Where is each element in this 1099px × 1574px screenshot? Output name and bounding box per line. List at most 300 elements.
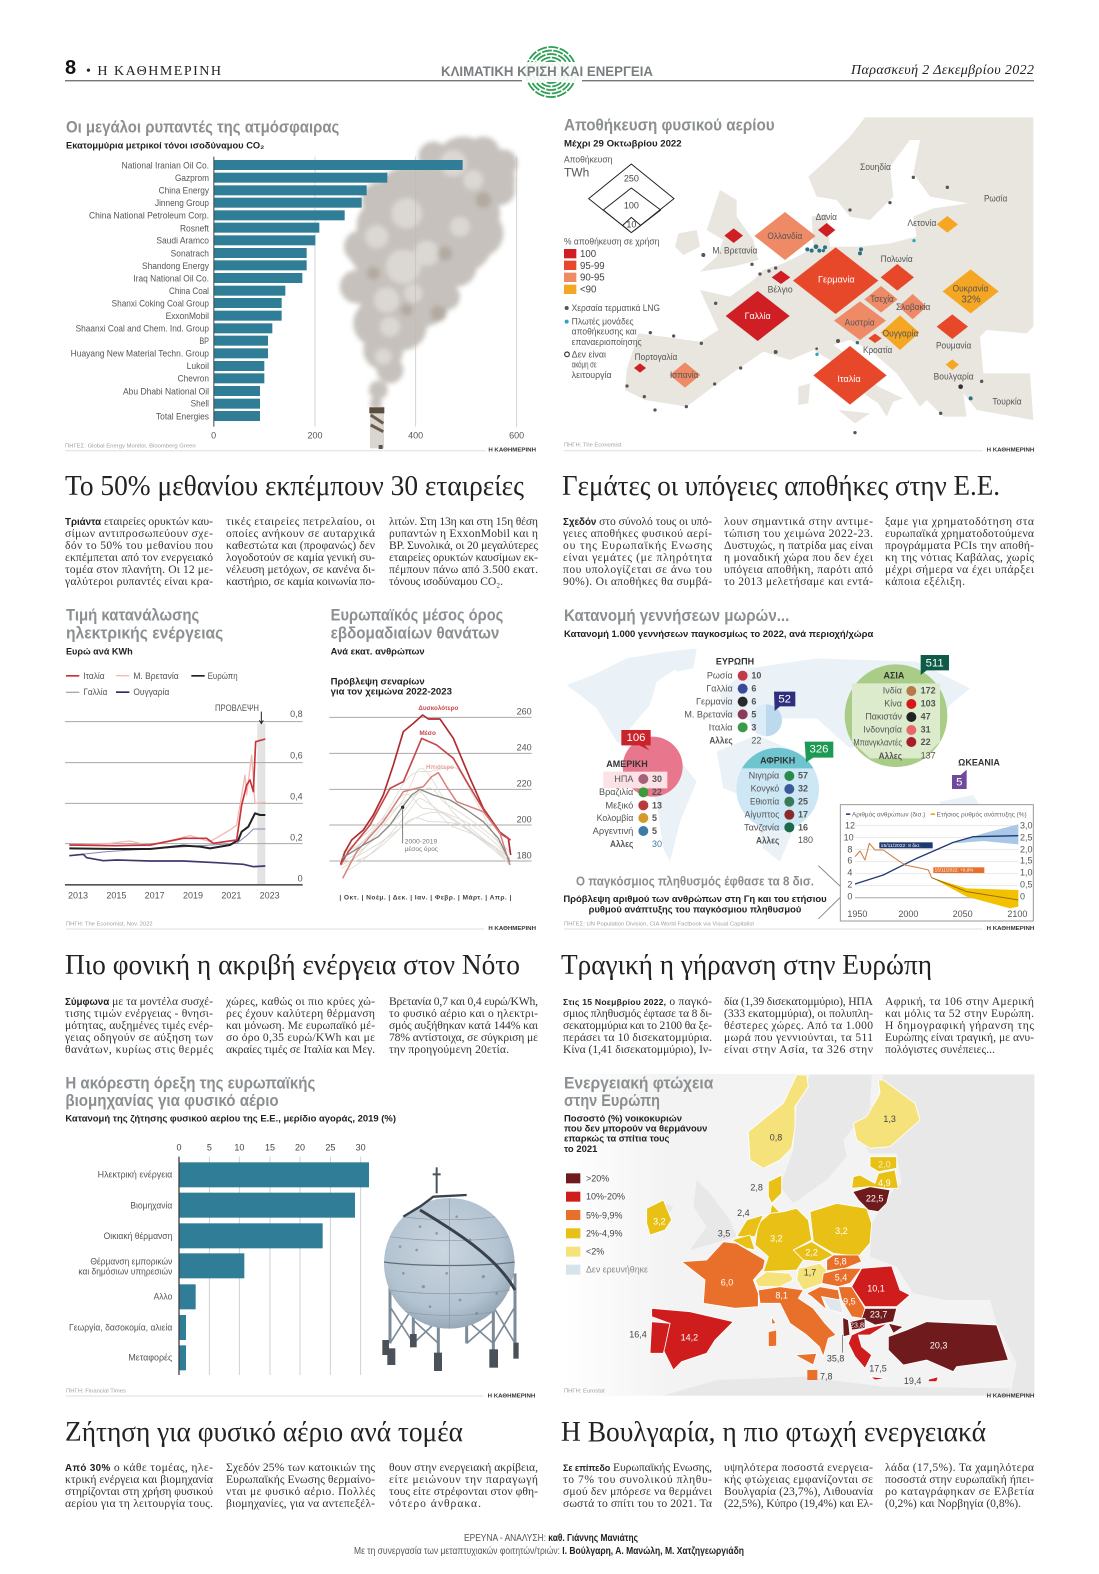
bubble: Africa: 326 xyxy=(810,744,828,756)
inset population chart: 2050 xyxy=(953,909,973,919)
source: ΠΗΓΗ: Financial Times xyxy=(66,1389,126,1395)
body text xyxy=(562,515,1035,588)
body text: περάσει τα 10 δισεκατομμύρια. xyxy=(563,1031,712,1044)
bubble: Europe: Μ. Βρετανία xyxy=(684,709,733,719)
axis labels: 30 xyxy=(356,1143,366,1153)
legend: storage size xyxy=(564,154,674,233)
body text: Ευρωπαϊκής Ενωσης θερμαίνο- xyxy=(226,1473,375,1486)
bubble: Asia: Μπανγκλαντές xyxy=(853,738,903,748)
country labels: Ισπανία xyxy=(670,370,698,380)
body text: μότητας, αυξημένες τιμές ενέρ- xyxy=(65,1019,213,1032)
y labels: 0,2 xyxy=(290,833,303,843)
body text: νται με φυσικό αέριο. Πολλές xyxy=(226,1485,375,1498)
inset population chart xyxy=(818,805,1033,921)
body text: τομέα στον πλανήτη. Οι 12 με- xyxy=(65,563,213,576)
x labels: 2019 xyxy=(183,890,203,900)
bubble: Asia: 137 xyxy=(921,750,936,760)
body text: είναι στην Ασία, τα 326 στην xyxy=(724,1043,873,1056)
panel: electricity consumption price line chart: ηλεκτρικής ενέργειας xyxy=(66,623,223,642)
legend: terminals: λειτουργία xyxy=(572,370,612,380)
bubble: Africa: Κονγκό xyxy=(751,784,779,794)
panel: largest atmospheric polluters bar chart xyxy=(65,118,536,454)
country labels: Ρουμανία xyxy=(936,340,971,350)
company labels: Sonatrach xyxy=(171,248,209,258)
bubble: Europe: 6 xyxy=(751,696,756,706)
map values light: 3,2 xyxy=(770,1234,783,1244)
axis labels xyxy=(176,1143,366,1153)
title: Ενεργειακή φτώχεια xyxy=(564,1073,714,1092)
y labels: 260 xyxy=(517,707,532,717)
date: Παρασκευή 2 Δεκεμβρίου 2022 xyxy=(850,63,1034,78)
x labels xyxy=(68,890,280,900)
company labels: Total Energies xyxy=(156,411,209,421)
article: expensive energy xyxy=(64,950,539,1056)
forecast description: Πρόβλεψη αριθμού των ανθρώπων στη Γη και του ετήσιου xyxy=(563,894,827,904)
category labels: Αλλο xyxy=(154,1292,172,1302)
title: Οι μεγάλοι ρυπαντές της ατμόσφαιρας xyxy=(66,118,339,137)
article: methane xyxy=(64,471,538,588)
panel: energy poverty map xyxy=(563,1073,1034,1399)
line: Hungary xyxy=(69,854,265,867)
legend: storage size: 10 xyxy=(626,220,636,230)
map values light: 2,2 xyxy=(805,1247,818,1257)
body text: μέχρι σήμερα να έχει υπάρξει xyxy=(885,563,1035,576)
body text: θουν στην ενεργειακή ακρίβεια, xyxy=(389,1461,538,1474)
bubble: Asia: Κίνα xyxy=(884,699,902,709)
scenario heading xyxy=(331,676,452,697)
legend: Ιταλία xyxy=(83,671,105,681)
storage diamonds xyxy=(634,212,999,405)
body text: Τριάντα εταιρείες ορυκτών καυ- xyxy=(65,515,213,528)
body text: υψηλότερα ποσοστά ενεργεια- xyxy=(724,1461,873,1474)
map values light: 2,0 xyxy=(878,1160,891,1170)
bubble: Americas: 13 xyxy=(652,800,662,810)
average callout xyxy=(401,806,438,853)
legend: terminals: ακόμη σε xyxy=(572,360,597,370)
legend: 10%-20% xyxy=(586,1192,625,1202)
body text: Σε επίπεδο Ευρωπαϊκής Ενωσης, xyxy=(563,1461,712,1474)
body text: Σχεδόν 25% των κατοικιών της xyxy=(226,1461,375,1474)
body text: την προηγούμενη 20ετία. xyxy=(389,1043,509,1056)
subtitle: Ευρώ ανά KWh xyxy=(66,646,133,656)
bubble: Americas: 22 xyxy=(652,787,662,797)
map values dark: 1,3 xyxy=(883,1114,896,1124)
body text: σεκατομμύρια και το 2100 θα ξε- xyxy=(563,1019,712,1032)
bubble: Europe: Γαλλία xyxy=(706,683,733,693)
body text: η μοναδική χώρα που δεν έχει xyxy=(724,551,874,564)
bubble: Europe: Ρωσία xyxy=(707,670,733,680)
country labels: Τουρκία xyxy=(992,397,1022,407)
inset population chart: 2 xyxy=(847,880,852,890)
body text: μωρά που γεννιούνται, τα 511 xyxy=(724,1031,873,1044)
source: ΠΗΓΕΣ: Global Energy Monitor, Bloomberg Green xyxy=(65,443,196,449)
legend: percent used: <90 xyxy=(580,285,596,296)
legend: Μ. Βρετανία xyxy=(133,671,179,681)
company labels: Iraq National Oil Co. xyxy=(133,273,209,283)
forecast description xyxy=(563,894,827,915)
chimney xyxy=(369,407,384,449)
x axis labels: 400 xyxy=(408,430,423,440)
scenario labels: Μέσο xyxy=(419,730,436,737)
company labels: Shanxi Coking Coal Group xyxy=(112,298,209,308)
bubble: Americas: Αργεντινή xyxy=(593,826,633,836)
y labels: 0,4 xyxy=(290,791,303,801)
bubble: Africa: 16 xyxy=(798,823,808,833)
bubble: Americas: Αλλες xyxy=(610,839,634,849)
bubble: Africa: 57 xyxy=(798,771,808,781)
body text: χώρες, καθώς οι πιο κρύες χώ- xyxy=(225,995,375,1008)
body text: Αφρική, τα 106 στην Αμερική xyxy=(885,995,1034,1008)
forecast label: ΠΡΟΒΛΕΨΗ xyxy=(215,703,259,713)
company labels: National Iranian Oil Co. xyxy=(122,161,209,171)
scenario labels xyxy=(418,704,458,771)
bubble: Oceania: 5 xyxy=(956,777,962,789)
bubble: Americas: ΑΜΕΡΙΚΗ xyxy=(606,759,648,769)
company labels: China Coal xyxy=(169,286,209,296)
bubble: Africa: Αίγυπτος xyxy=(745,810,780,820)
country labels: Ουκρανία xyxy=(953,283,988,293)
y labels xyxy=(290,709,303,884)
historic years lines xyxy=(342,767,510,872)
x axis labels: 200 xyxy=(307,430,322,440)
company labels: Abu Dhabi National Oil xyxy=(123,386,209,396)
section title: ΚΛΙΜΑΤΙΚΗ ΚΡΙΣΗ ΚΑΙ ΕΝΕΡΓΕΙΑ xyxy=(441,63,653,79)
bubble: Africa: 32 xyxy=(798,784,808,794)
headline: Τραγική η γήρανση στην Ευρώπη xyxy=(561,950,932,981)
body text: είναι γεμάτες (με πληρότητα xyxy=(563,551,712,564)
legend: terminals: αποθήκευσης και xyxy=(572,327,637,337)
company labels: Saudi Aramco xyxy=(156,236,209,246)
map land background xyxy=(625,117,1033,423)
map values light: 14,2 xyxy=(681,1333,698,1343)
bubble: Africa: 180 xyxy=(798,835,813,845)
map values dark: 2,4 xyxy=(737,1208,750,1218)
map values light: 20,3 xyxy=(930,1341,947,1351)
body text: και μόνωση. Με ευρωπαϊκό μέ- xyxy=(226,1019,375,1032)
body text: κη της νότιας Καβάλας, χωρίς xyxy=(885,551,1034,564)
bubble: Europe: 52 xyxy=(778,693,791,705)
bubble: Asia: 47 xyxy=(921,712,931,722)
map values light: 5,8 xyxy=(834,1256,847,1266)
headline: Πιο φονική η ακριβή ενέργεια στον Νότο xyxy=(65,950,520,981)
legend: >20% xyxy=(586,1174,609,1184)
credits footer xyxy=(354,1532,744,1557)
bubble: Europe: Γερμανία xyxy=(696,696,733,706)
body text xyxy=(65,1461,538,1510)
article: gas storage xyxy=(562,471,1035,588)
country labels: Βέλγιο xyxy=(768,285,793,295)
Malta marker: 7,8 xyxy=(820,1371,832,1381)
credit: Η ΚΑΘΗΜΕΡΙΝΗ xyxy=(987,926,1034,932)
map values light xyxy=(653,1160,947,1351)
bubble: Europe xyxy=(684,656,795,746)
body text: θέστερες χώρες. Από τα 1.000 xyxy=(724,1019,873,1032)
headline: Το 50% μεθανίου εκπέμπουν 30 εταιρείες xyxy=(65,471,524,502)
credits footer: Με τη συνεργασία των μεταπτυχιακών φοιτητών/τριών: Ι. Βούλγαρη, Α. Μανώλη, Μ. Χατζηγεωργιάδη xyxy=(354,1545,744,1557)
body text: Σχεδόν στο σύνολό τους οι υπό- xyxy=(563,515,712,528)
panel: natural gas demand bar chart xyxy=(65,1073,535,1399)
bubble: Americas: 30 xyxy=(652,839,662,849)
subtitle: Κατανομή της ζήτησης φυσικού αερίου της Ε.Ε., μερίδιο αγοράς, 2019 (%) xyxy=(65,1113,396,1123)
map values dark: 17,5 xyxy=(869,1363,887,1373)
legend: terminals: επαναεριοποίησης xyxy=(572,337,642,347)
map values dark: 3,5 xyxy=(718,1228,730,1238)
x labels: 2013 xyxy=(68,890,88,900)
scenario labels: Δυσκολότερο xyxy=(418,704,458,712)
source: ΠΗΓΗ: Eurostat xyxy=(564,1389,605,1395)
body text: βιομηχανίες, για να αντεπεξέλ- xyxy=(226,1497,375,1510)
map values light: 5,4 xyxy=(835,1272,847,1282)
axis labels: 15 xyxy=(265,1143,275,1153)
bubble: Africa: ΑΦΡΙΚΗ xyxy=(760,755,795,765)
line: France xyxy=(69,829,265,856)
body text: σωστά το σπίτι του το 2021. Τα xyxy=(563,1497,712,1510)
bubble: Asia: ΑΣΙΑ xyxy=(884,670,905,680)
legend: storage size: 250 xyxy=(624,173,639,183)
article: ageing xyxy=(561,950,1034,1056)
bubble: Africa: 25 xyxy=(798,797,808,807)
bubble: Asia: 511 xyxy=(926,657,944,669)
legend: 5%-9,9% xyxy=(586,1210,622,1220)
bubble: Americas: 5 xyxy=(652,813,657,823)
body text: Δυστυχώς, η πατρίδα μας είναι xyxy=(724,539,874,552)
body text: το 7% του συνολικού πληθυ- xyxy=(563,1473,712,1486)
credit: Η ΚΑΘΗΜΕΡΙΝΗ xyxy=(987,1393,1034,1399)
x axis labels: 0 xyxy=(211,430,216,440)
country labels: Αυστρία xyxy=(845,318,875,328)
scenario heading: Πρόβλεψη σεναρίων xyxy=(331,676,425,686)
map values light: 10,1 xyxy=(867,1283,885,1293)
body text: 78% αντίστοιχα, σε σύγκριση με xyxy=(389,1031,538,1044)
inset population chart: 2,0 xyxy=(1020,844,1032,854)
body text: και μόλις τα 52 στην Ευρώπη. xyxy=(885,1007,1034,1020)
panel: weekly deaths line chart: εβδομαδιαίων θανάτων xyxy=(331,623,499,642)
legend xyxy=(66,671,238,697)
bars xyxy=(179,1162,369,1370)
bubble: Africa xyxy=(736,742,833,846)
body text: γαλύτεροι ρυπαντές είναι κρα- xyxy=(64,575,213,588)
subtitle: Ποσοστό (%) νοικοκυριών xyxy=(564,1113,682,1123)
body text: εκπέμπεται από τον ενεργειακό xyxy=(65,551,213,564)
company labels: BP xyxy=(199,336,209,346)
bubble: Oceania: ΩΚΕΑΝΙΑ xyxy=(958,757,1000,767)
legend: percent used xyxy=(564,236,659,296)
country labels: Κροατία xyxy=(863,345,892,355)
legend: Γαλλία xyxy=(83,687,107,697)
bubble: Europe: 22 xyxy=(751,736,761,746)
subtitle: το 2021 xyxy=(564,1144,597,1154)
country labels: Πολωνία xyxy=(881,254,913,264)
source: ΠΗΓΗ: The Economist, Nov. 2022 xyxy=(66,922,153,928)
body text: εταιρείες ορυκτών καυσίμων εκ- xyxy=(389,551,538,564)
company labels: Shandong Energy xyxy=(142,261,209,271)
credit: Η ΚΑΘΗΜΕΡΙΝΗ xyxy=(488,1393,535,1399)
body text: Ευρώπης είναι τραγική, με ανυ- xyxy=(885,1031,1034,1044)
body text: πολόγιστες συνέπειες... xyxy=(885,1043,995,1056)
body text: σμού δεν μπόρεσε να θερμάνει xyxy=(563,1485,713,1498)
body text: (333 εκατομμύρια), οι πολυπλη- xyxy=(724,1007,873,1020)
title: Η ακόρεστη όρεξη της ευρωπαϊκής xyxy=(65,1073,315,1092)
body text: προγράμματα PCIs την αποθή- xyxy=(885,539,1034,552)
floating units xyxy=(805,239,973,400)
body text: τισης τιμών ενέργειας - θνησι- xyxy=(65,1007,213,1020)
body text: σο όρο 0,35 ευρώ/KWh και με xyxy=(226,1031,375,1044)
panel: energy poverty map: στην Ευρώπη xyxy=(564,1091,660,1110)
body text: ρο καταγράφηκαν σε Ελβετία xyxy=(885,1485,1034,1498)
subtitle: Μέχρι 29 Οκτωβρίου 2022 xyxy=(564,139,682,149)
bubble: Africa: Τανζανία xyxy=(744,823,779,833)
map values light: 9,5 xyxy=(843,1297,856,1307)
map values dark: 2,8 xyxy=(750,1183,763,1193)
subtitle: επαρκώς τα σπίτια τους xyxy=(564,1134,670,1144)
company labels: China National Petroleum Corp. xyxy=(89,211,209,221)
country labels: 32% xyxy=(961,295,981,306)
inset population chart: 10 xyxy=(844,832,854,842)
body text: στηρίζονται στη χρήση φυσικού xyxy=(65,1485,213,1498)
legend: terminals: Δεν είναι xyxy=(572,349,606,359)
y labels: 0,6 xyxy=(290,750,303,760)
country labels: Γερμανία xyxy=(818,274,855,284)
bubble: Asia: 103 xyxy=(921,699,936,709)
gas storage sphere photo xyxy=(382,1167,519,1371)
company labels: Lukoil xyxy=(187,361,209,371)
body text: Κίνα (1,41 δισεκατομμύριο), Ιν- xyxy=(563,1043,712,1056)
legend: storage size: 100 xyxy=(624,200,639,210)
article: Bulgaria xyxy=(561,1417,1034,1510)
body text xyxy=(64,995,539,1056)
inset population chart: 2100 xyxy=(1007,909,1027,919)
bubble: Asia: Ινδία xyxy=(883,686,902,696)
bubble: Americas: Μεξικό xyxy=(605,800,633,810)
legend: storage size: Αποθήκευση xyxy=(564,154,612,164)
axis xyxy=(65,884,303,886)
body text xyxy=(64,515,538,588)
category labels: Ηλεκτρική ενέργεια xyxy=(98,1170,172,1180)
credit: Η ΚΑΘΗΜΕΡΙΝΗ xyxy=(488,926,536,932)
axis labels: 10 xyxy=(234,1143,244,1153)
bubble: Oceania xyxy=(952,757,1000,789)
map values light: 6,0 xyxy=(721,1277,733,1287)
map values dark: 16,4 xyxy=(629,1329,647,1339)
inset population chart: 2000 xyxy=(898,909,918,919)
bubble: Asia: 31 xyxy=(921,725,931,735)
panel: births distribution map xyxy=(563,606,1034,932)
category labels xyxy=(69,1170,173,1363)
bubble: Africa: Αλλες xyxy=(756,836,780,846)
line: 2000-2019 average xyxy=(342,789,510,862)
bubble: Europe: 3 xyxy=(751,722,756,732)
category labels: Οικιακή θέρμανση xyxy=(104,1231,172,1241)
headline: Η Βουλγαρία, η πιο φτωχή ενεργειακά xyxy=(561,1417,986,1448)
company labels: Chevron xyxy=(178,374,209,384)
body text xyxy=(563,995,1034,1056)
country labels: Μ. Βρετανία xyxy=(712,245,757,255)
body text: Σύμφωνα με τα μοντέλα συσχέ- xyxy=(65,995,213,1008)
x axis labels: 600 xyxy=(509,430,524,440)
map values light: 4,9 xyxy=(878,1178,891,1188)
bubble: Africa: Νιγηρία xyxy=(749,771,779,781)
inset population chart: 15/11/2022: 8 δισ. xyxy=(881,843,921,849)
title: Τιμή κατανάλωσης xyxy=(66,606,199,625)
body text: ου της Ευρωπαϊκής Ενωσης xyxy=(563,539,712,552)
map values light: 3,2 xyxy=(653,1216,666,1226)
body text: τους είτε στρέφονται στον φθη- xyxy=(389,1485,538,1498)
average callout: 2000-2019 xyxy=(405,838,438,845)
headline: Ζήτηση για φυσικό αέριο ανά τομέα xyxy=(65,1417,463,1448)
body text: δία (1,39 δισεκατομμύριο), ΗΠΑ xyxy=(724,995,874,1008)
Malta marker xyxy=(807,1370,832,1381)
panel: electricity consumption price line chart xyxy=(65,606,303,900)
body text: γειας οδηγούν σε αύξηση των xyxy=(64,1031,213,1044)
y labels: 180 xyxy=(517,850,532,860)
x axis labels xyxy=(211,430,524,440)
axis labels: 20 xyxy=(295,1143,305,1153)
inset population chart: 0 xyxy=(847,892,852,902)
company labels: Huayang New Material Techn. Group xyxy=(71,349,209,359)
body text: καθεστώτα και (προφανώς) δεν xyxy=(226,539,375,552)
body text: ρυπαντών η ExxonMobil και η xyxy=(389,527,538,540)
legend: percent used: 100 xyxy=(580,249,596,260)
headline: Γεμάτες οι υπόγειες αποθήκες στην Ε.Ε. xyxy=(562,471,1000,502)
country labels: Ολλανδία xyxy=(767,231,802,241)
legend: percent used: % αποθήκευση σε χρήση xyxy=(564,236,659,246)
body text: Βρετανία 0,7 και 0,4 ευρώ/KWh, xyxy=(389,995,538,1008)
country labels: Δανία xyxy=(816,212,837,222)
subtitle xyxy=(564,1113,707,1154)
credit: Η ΚΑΘΗΜΕΡΙΝΗ xyxy=(488,448,536,454)
body text: αερίου για τη λειτουργία τους. xyxy=(65,1497,213,1510)
body text: λιτών. Στη 13η και στη 15η θέση xyxy=(389,515,538,528)
panel: natural gas demand bar chart: βιομηχανίας για φυσικό αέριο xyxy=(65,1091,279,1110)
country labels: Ρωσία xyxy=(984,194,1007,204)
legend: terminals xyxy=(565,303,660,380)
body text: Στις 15 Νοεμβρίου 2022, ο παγκό- xyxy=(563,995,712,1008)
bubble: Asia xyxy=(845,655,949,767)
body text: πέμπουν πάνω από 3.500 εκατ. xyxy=(389,563,538,576)
title: Ευρωπαϊκός μέσος όρος xyxy=(331,606,503,625)
bubble: Americas: Κολομβία xyxy=(597,813,633,823)
company labels: Shaanxi Coal and Chem. Ind. Group xyxy=(76,324,209,334)
body text: BP. Συνολικά, οι 20 μεγαλύτερες xyxy=(389,539,538,552)
inset population chart: 1,0 xyxy=(1020,868,1032,878)
countries xyxy=(647,1075,1008,1382)
line: UK xyxy=(69,755,265,846)
body text: Η δημογραφική γήρανση της xyxy=(885,1019,1034,1032)
x labels: 2015 xyxy=(106,890,126,900)
forecast description: ρυθμού ανάπτυξης του παγκόσμιου πληθυσμού xyxy=(589,905,801,915)
map values dark: 1,7 xyxy=(804,1267,816,1277)
body text: που υπολογίζεται σε άνω του xyxy=(563,563,712,576)
country labels: Λετονία xyxy=(907,218,936,228)
body text xyxy=(563,1461,1034,1510)
bubble: Europe: ΕΥΡΩΠΗ xyxy=(716,656,754,666)
country labels: Βουλγαρία xyxy=(934,371,974,381)
LNG terminals xyxy=(625,176,983,434)
body text: σίμων αντιπροσωπεύουν σχε- xyxy=(65,527,213,540)
country labels: Ουγγαρία xyxy=(883,328,918,338)
x labels: 2021 xyxy=(221,890,241,900)
inset population chart: Αριθμός ανθρώπων (δισ.) xyxy=(852,810,925,818)
x labels: 2023 xyxy=(260,890,280,900)
body text: καστήριο, σε καμία κοινωνία πο- xyxy=(226,575,375,588)
bubble: Europe: Ιταλία xyxy=(709,722,733,732)
legend: terminals: Πλωτές μονάδες xyxy=(572,317,634,327)
panel: weekly deaths line chart xyxy=(66,606,536,932)
smoke plume image xyxy=(340,137,517,409)
country labels: Γαλλία xyxy=(745,311,771,321)
company labels: China Energy xyxy=(159,186,209,196)
legend xyxy=(566,1173,648,1275)
